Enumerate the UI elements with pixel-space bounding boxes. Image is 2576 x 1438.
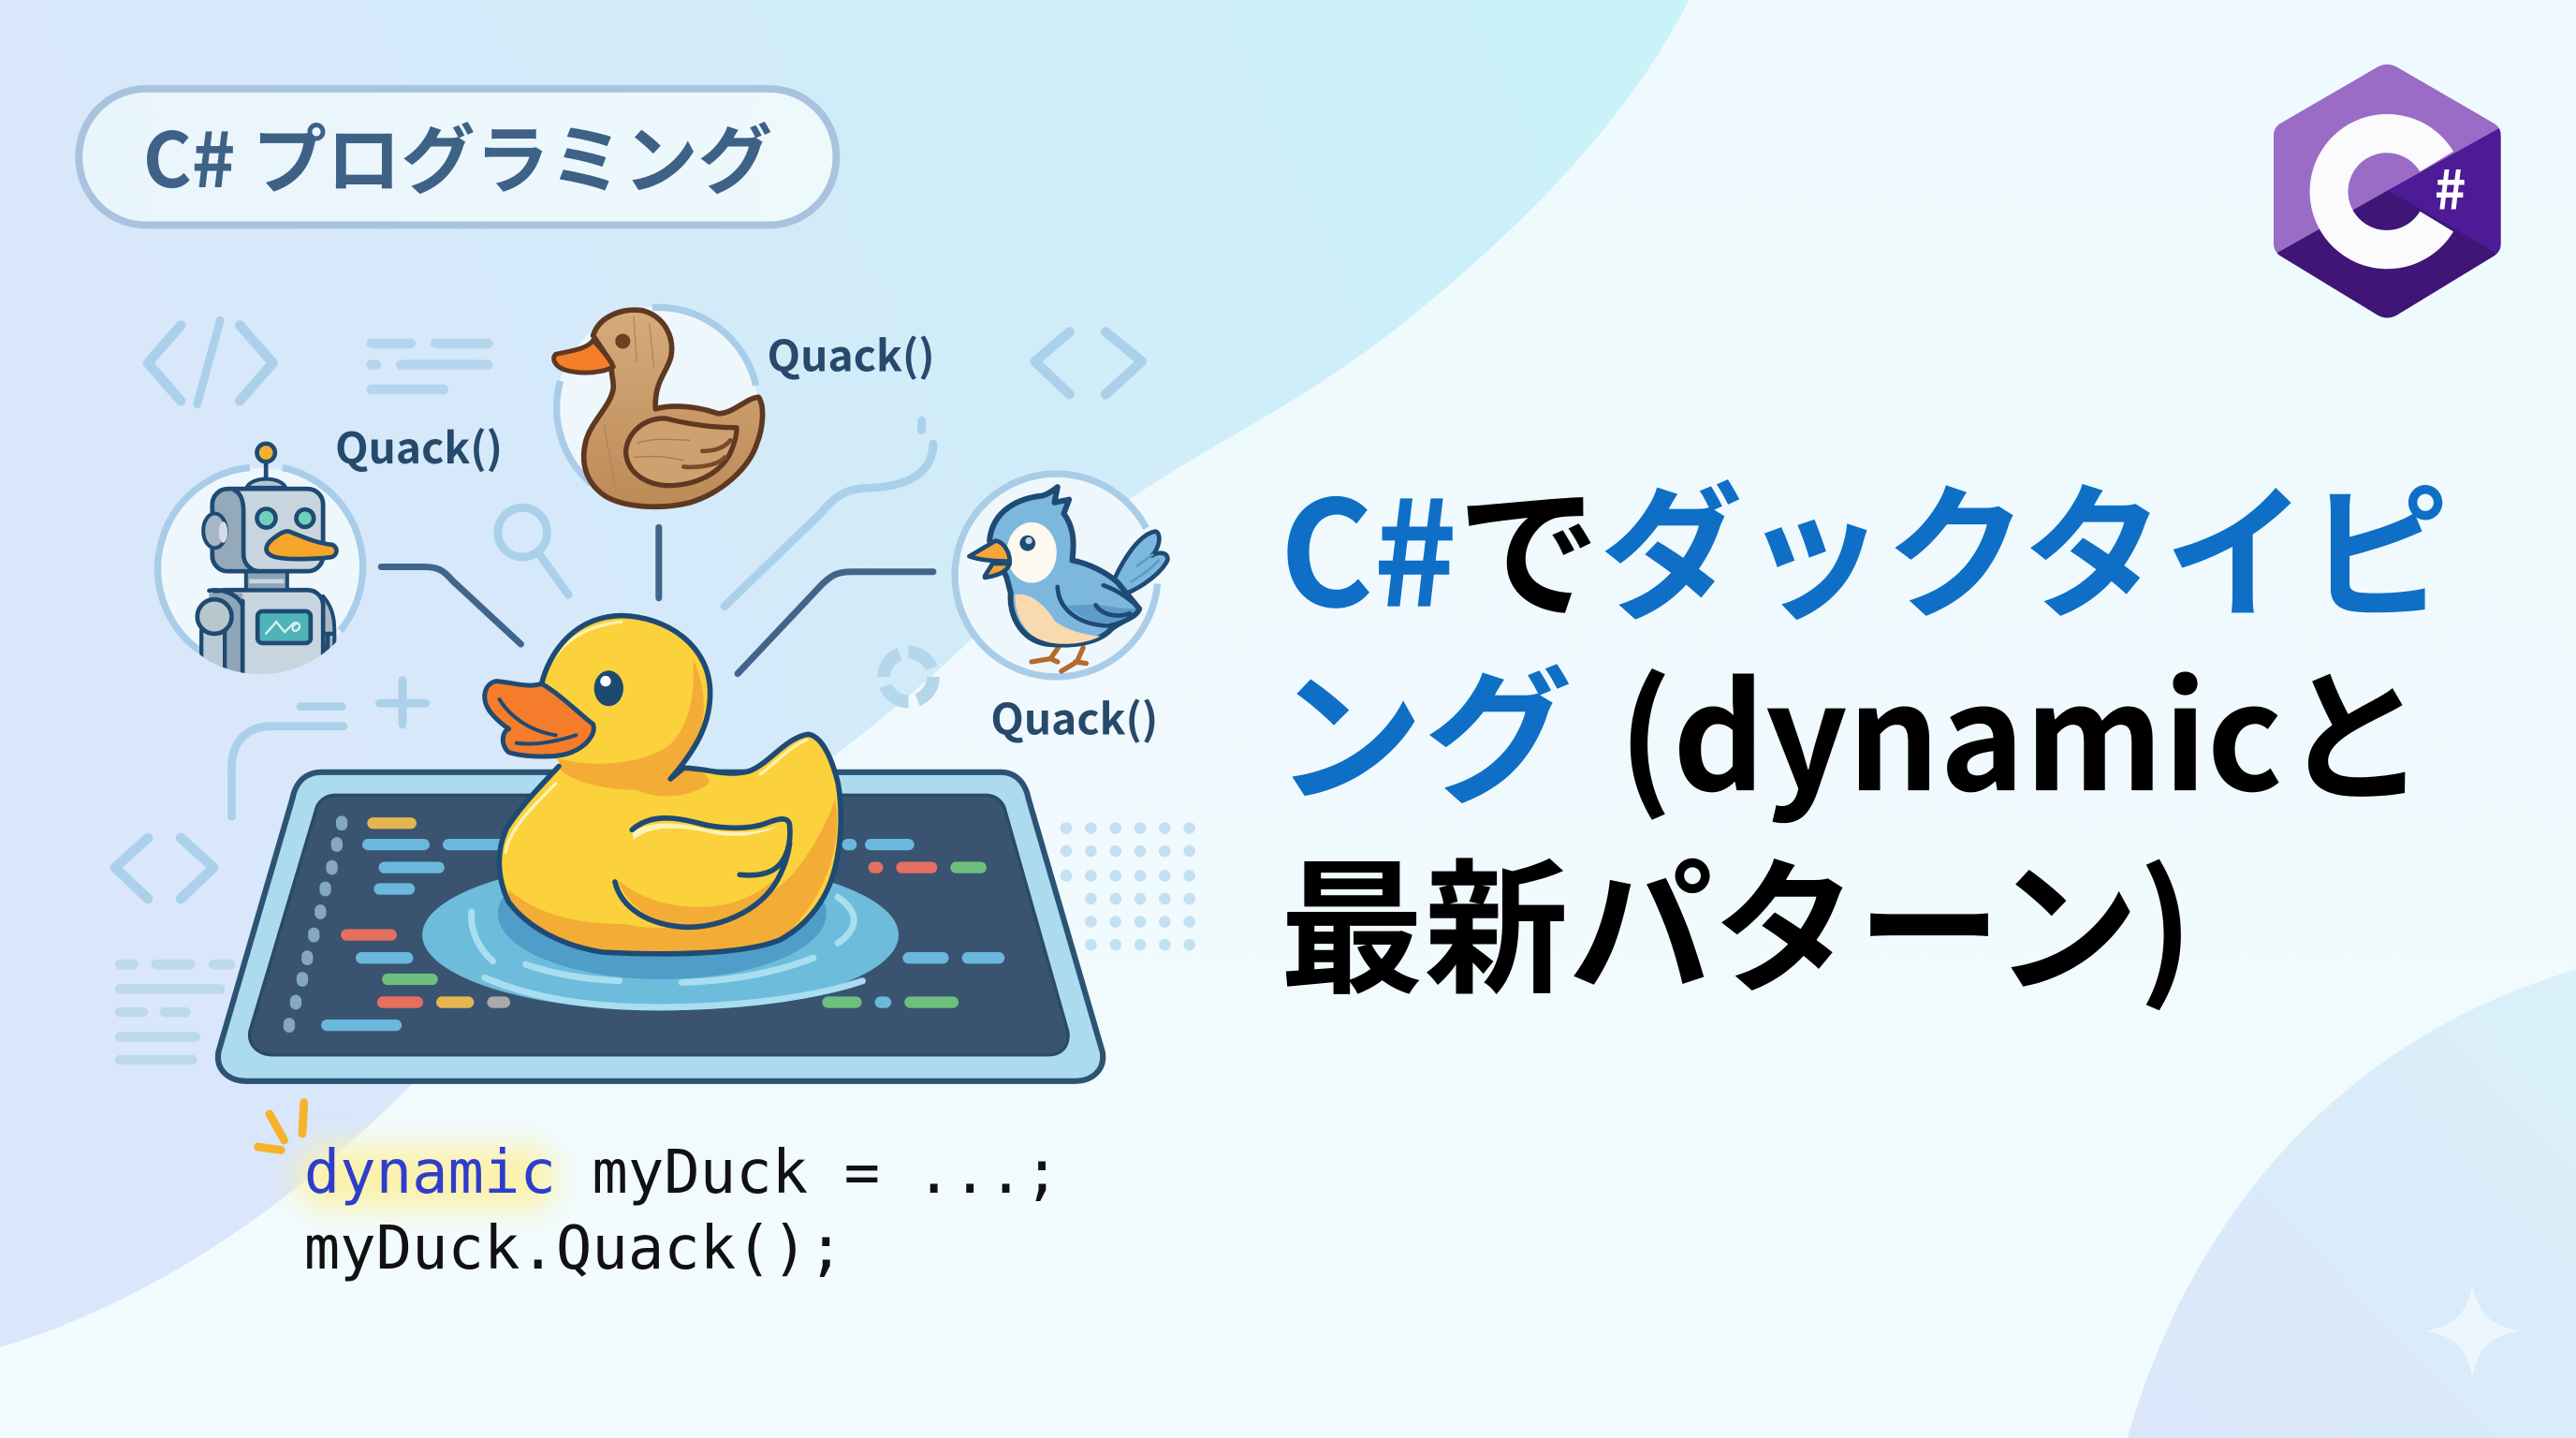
water ripple	[422, 848, 899, 1010]
badge: C# programming	[79, 89, 836, 225]
connector lines	[381, 527, 933, 674]
code snippet: myDuck.Quack();	[304, 1214, 844, 1284]
code highlight glow	[299, 1147, 555, 1210]
icon: C# logo	[2266, 59, 2507, 321]
decorations: faint code glyphs	[115, 320, 1142, 1060]
code snippet: dynamic myDuck = ...;	[304, 1138, 1060, 1208]
code snippet	[304, 1138, 1060, 1284]
title: 最新パターン)	[1280, 812, 2193, 1023]
icon: wooden duck	[554, 307, 763, 508]
background: lower-right blob	[2128, 969, 2576, 1438]
badge: C# programming: C# プログラミング	[143, 100, 772, 210]
icon: C# logo: #	[2435, 147, 2466, 226]
icon: spark marks	[258, 1103, 304, 1151]
label: Quack() bird: Quack()	[990, 685, 1158, 747]
title	[1275, 437, 2450, 1023]
main rubber duck	[485, 616, 841, 954]
code bars	[289, 822, 999, 1027]
code screen platform	[218, 772, 1103, 1081]
dot matrix	[1061, 822, 1195, 950]
label: Quack() wooden duck: Quack()	[768, 323, 935, 385]
icon: blue bird	[953, 473, 1167, 677]
title: C#でダックタイピ	[1280, 437, 2450, 649]
title: (dynamicと	[1618, 621, 2426, 832]
title: ング	[1275, 621, 1573, 832]
icon: sparkle	[2426, 1284, 2519, 1377]
label: Quack() robot: Quack()	[335, 415, 503, 477]
background: upper-left blue blob	[0, 0, 1689, 1347]
icon: robot duck	[158, 444, 363, 690]
